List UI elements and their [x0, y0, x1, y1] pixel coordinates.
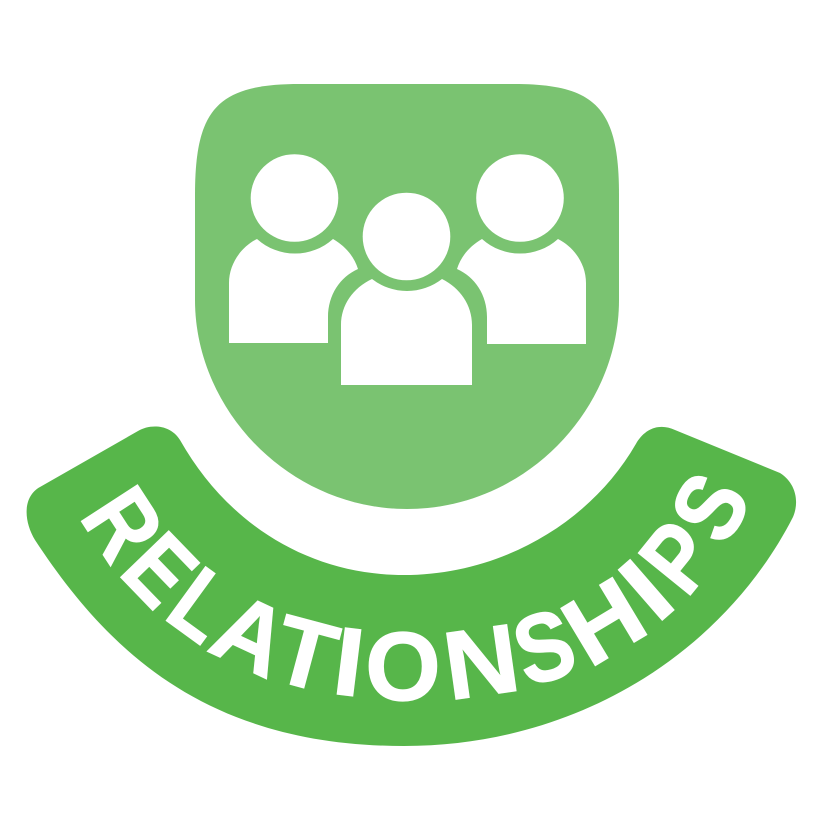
banner label: RELATIONSHIPS: O — [365, 612, 441, 721]
icon: left person — [229, 154, 358, 343]
banner label: RELATIONSHIPS: P — [620, 502, 738, 613]
banner label: RELATIONSHIPS: H — [545, 557, 664, 687]
banner label: RELATIONSHIPS — [61, 456, 772, 721]
banner label: RELATIONSHIPS: N — [437, 604, 526, 721]
icon: right person — [457, 154, 586, 344]
banner label: RELATIONSHIPS: R — [61, 469, 184, 579]
banner label: RELATIONSHIPS: T — [263, 593, 348, 714]
banner label: RELATIONSHIPS: I — [599, 539, 693, 641]
icon: centre person — [341, 193, 472, 385]
banner label: RELATIONSHIPS: I — [328, 606, 370, 718]
banner label: RELATIONSHIPS: L — [150, 546, 254, 663]
banner label: RELATIONSHIPS: A — [196, 570, 306, 699]
banner label: RELATIONSHIPS: S — [649, 456, 772, 559]
panel: shield — [195, 84, 619, 509]
panel: curved banner — [27, 427, 796, 746]
icon: group of people — [229, 154, 586, 385]
banner label: RELATIONSHIPS: E — [101, 513, 217, 628]
banner label: RELATIONSHIPS: S — [501, 587, 587, 708]
